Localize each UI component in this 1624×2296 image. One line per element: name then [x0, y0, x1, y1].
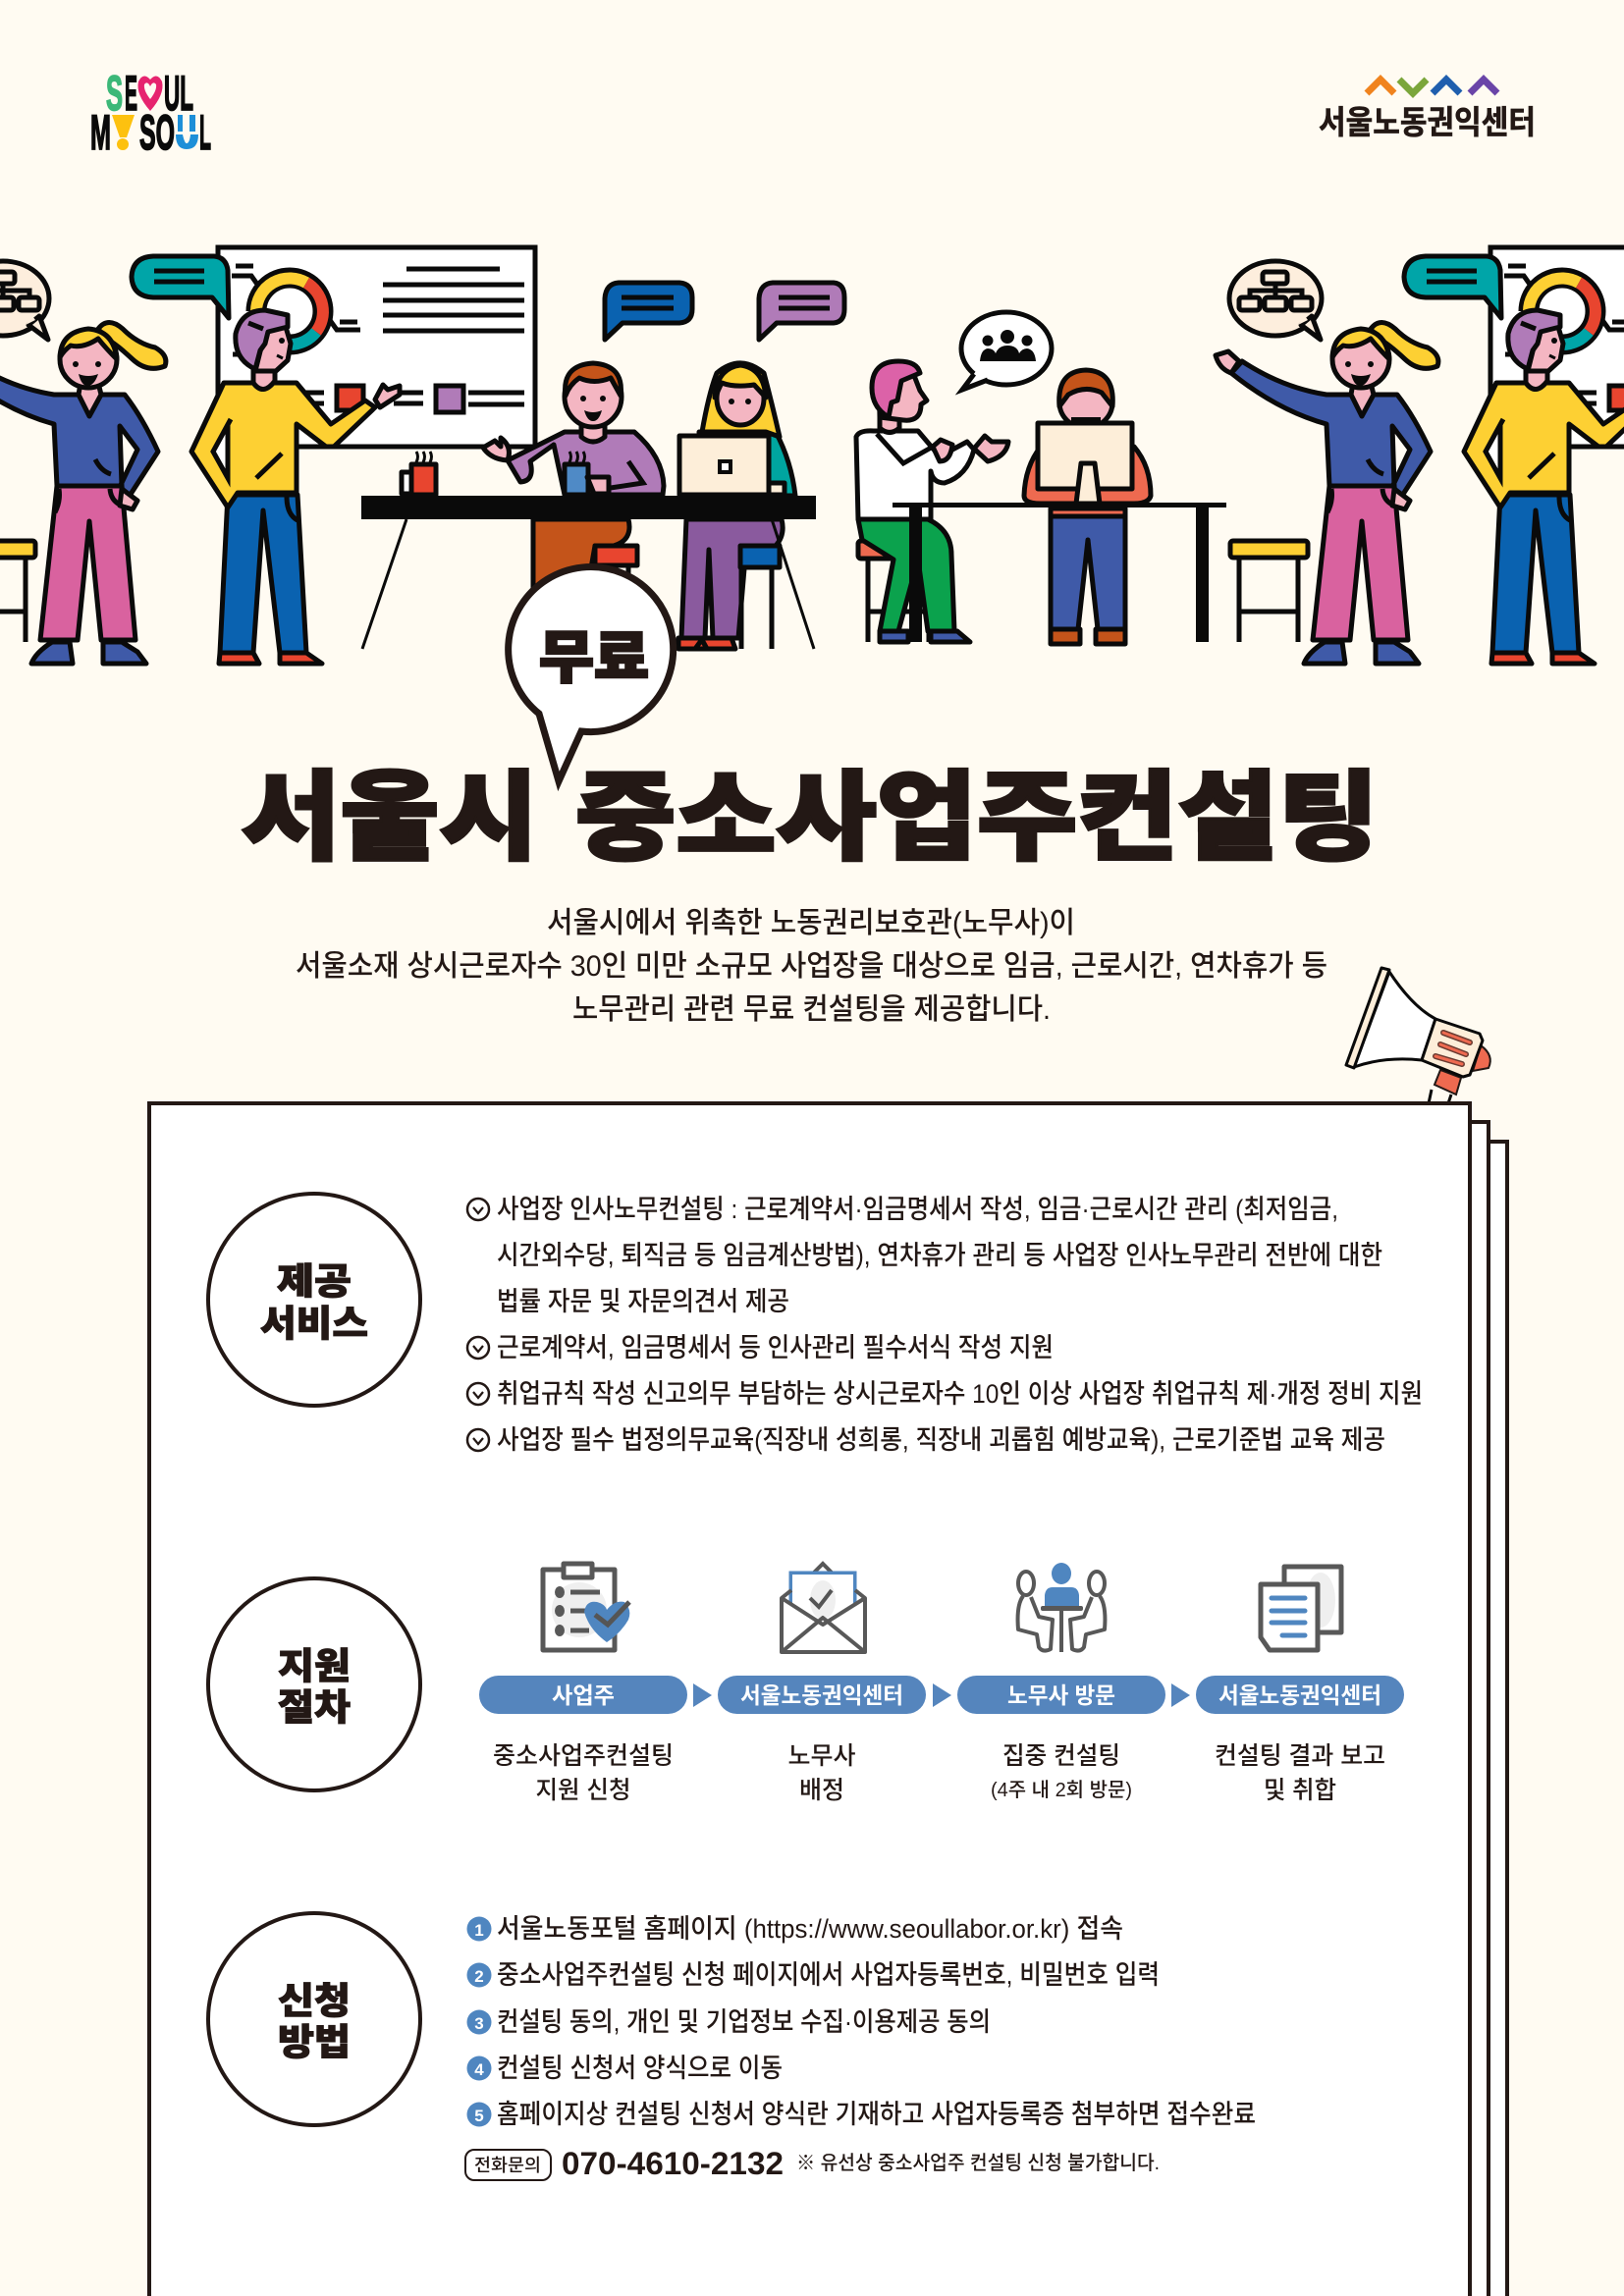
contact row: ※ 유선상 중소사업주 컨설팅 신청 불가합니다.: [796, 2152, 1160, 2174]
arrow 3: [1171, 1683, 1190, 1707]
contact row: [465, 2146, 1160, 2181]
logo: Seoul My Soul: S: [106, 66, 123, 121]
icon: documents: [1261, 1567, 1341, 1650]
title: [242, 763, 1379, 872]
step 2: 서울노동권익센터: [740, 1682, 903, 1708]
contact row: 전화문의: [474, 2156, 541, 2175]
bubble: blue speech: [605, 283, 692, 340]
list: steps: 컨설팅 동의, 개인 및 기업정보 수집·이용제공 동의: [497, 2007, 991, 2037]
step 1: 중소사업주컨설팅: [493, 1742, 674, 1770]
step 3: [957, 1676, 1165, 1801]
bubble: purple speech: [759, 283, 844, 340]
logo: Seoul My Soul: [90, 66, 211, 160]
icon: clipboard: [543, 1564, 629, 1650]
icon: envelope: [782, 1564, 865, 1652]
speech bubble: free: 무료: [539, 626, 649, 690]
logo: Seoul My Soul: E: [125, 66, 137, 121]
person: at monitor: [1024, 370, 1151, 644]
step 3: 노무사 방문: [1007, 1682, 1115, 1708]
panel: main sheet: [149, 1103, 1470, 2296]
step 2: [718, 1676, 926, 1804]
step 1: 사업주: [552, 1682, 615, 1708]
list: steps: [467, 1914, 1256, 2129]
step 4: 서울노동권익센터: [1218, 1682, 1381, 1708]
list: steps: 컨설팅 신청서 양식으로 이동: [497, 2054, 783, 2083]
people: presenters right: [1216, 247, 1624, 664]
list: steps: 1: [474, 1921, 484, 1940]
list: steps: 2: [474, 1967, 484, 1986]
logo: Seoul Labor Rights Center: [1319, 80, 1536, 140]
badge: how to apply: 신청: [278, 1981, 351, 2021]
intro paragraph: 노무관리 관련 무료 컨설팅을 제공합니다.: [572, 993, 1051, 1026]
bubble: group icon: [961, 312, 1052, 390]
step 4: 컨설팅 결과 보고: [1215, 1742, 1385, 1770]
list: steps: 홈페이지상 컨설팅 신청서 양식란 기재하고 사업자등록증 첨부하면 접수완료: [497, 2100, 1256, 2129]
step 3: 집중 컨설팅: [1002, 1742, 1120, 1770]
icon: meeting: [1018, 1563, 1105, 1652]
poster: L: [199, 105, 211, 160]
person: white shirt man: [856, 361, 1008, 642]
table: thin desk: [893, 503, 1226, 642]
step 2: 노무사: [787, 1742, 856, 1770]
list: services: 사업장 인사노무컨설팅 : 근로계약서·임금명세서 작성, 임금·근로시간 관리 (최저임금,: [497, 1195, 1338, 1224]
illustration: office consulting scene: [0, 247, 1624, 664]
list: steps: 4: [474, 2060, 484, 2079]
list: steps: 5: [474, 2107, 484, 2125]
logo: Seoul My Soul: UL: [164, 66, 193, 121]
arrow 2: [933, 1683, 951, 1707]
panel stack: back sheets: [169, 1122, 1507, 2296]
badge: procedure: [208, 1578, 420, 1790]
speech bubble: free: [509, 567, 674, 781]
list: services: 근로계약서, 임금명세서 등 인사관리 필수서식 작성 지원: [497, 1333, 1054, 1362]
badge: services: 제공: [277, 1261, 352, 1302]
contact row: 070-4610-2132: [562, 2146, 784, 2181]
title: 중소사업주컨설팅: [575, 763, 1379, 872]
badge: how to apply: [208, 1913, 420, 2125]
badge: services: [208, 1194, 420, 1406]
list: services: 시간외수당, 퇴직금 등 임금계산방법), 연차휴가 관리 등 사업장 인사노무관리 전반에 대한: [497, 1241, 1382, 1270]
logo: Seoul Labor Rights Center: 서울노동권익센터: [1319, 104, 1536, 140]
step 2: 배정: [799, 1777, 844, 1804]
list: steps: 서울노동포털 홈페이지 (https://www.seoullabor.or.kr) 접속: [497, 1914, 1123, 1944]
list: services: 취업규칙 작성 신고의무 부담하는 상시근로자수 10인 이상 사업장 취업규칙 제·개정 정비 지원: [497, 1379, 1423, 1409]
step 4: 및 취합: [1264, 1777, 1336, 1804]
people: presenters left: [0, 247, 535, 664]
step 3: (4주 내 2회 방문): [991, 1779, 1132, 1801]
logo: Seoul My Soul: SO: [139, 105, 175, 160]
person: seated purple sweater: [483, 363, 664, 599]
icon: megaphone: [1346, 968, 1490, 1103]
section: how to apply: [208, 1913, 1256, 2181]
list: services: 사업장 필수 법정의무교육(직장내 성희롱, 직장내 괴롭힘 예방교육), 근로기준법 교육 제공: [497, 1425, 1385, 1455]
table: black bar: [361, 496, 816, 649]
logo: Seoul My Soul: M: [90, 105, 111, 160]
person: woman with laptop: [678, 363, 795, 649]
step 4: [1196, 1676, 1404, 1804]
section: services: [208, 1194, 1423, 1455]
intro paragraph: 서울시에서 위촉한 노동권리보호관(노무사)이: [547, 907, 1075, 939]
list: services: [467, 1195, 1423, 1455]
badge: procedure: 지원: [278, 1646, 351, 1686]
title: 서울시: [242, 763, 538, 872]
step 1: [479, 1676, 687, 1804]
badge: services: 서비스: [260, 1304, 368, 1344]
step 1: 지원 신청: [536, 1777, 630, 1804]
list: services: 법률 자문 및 자문의견서 제공: [497, 1287, 789, 1316]
intro paragraph: 서울소재 상시근로자수 30인 미만 소규모 사업장을 대상으로 임금, 근로시간, 연차휴가 등: [296, 950, 1327, 983]
list: steps: 3: [474, 2014, 484, 2033]
badge: procedure: 절차: [278, 1687, 351, 1728]
section: procedure: [208, 1563, 1404, 1804]
intro paragraph: [296, 907, 1327, 1026]
badge: how to apply: 방법: [278, 2022, 351, 2062]
mug: red: [402, 452, 436, 495]
arrow 1: [693, 1683, 712, 1707]
list: steps: 중소사업주컨설팅 신청 페이지에서 사업자등록번호, 비밀번호 입력: [497, 1960, 1160, 1990]
